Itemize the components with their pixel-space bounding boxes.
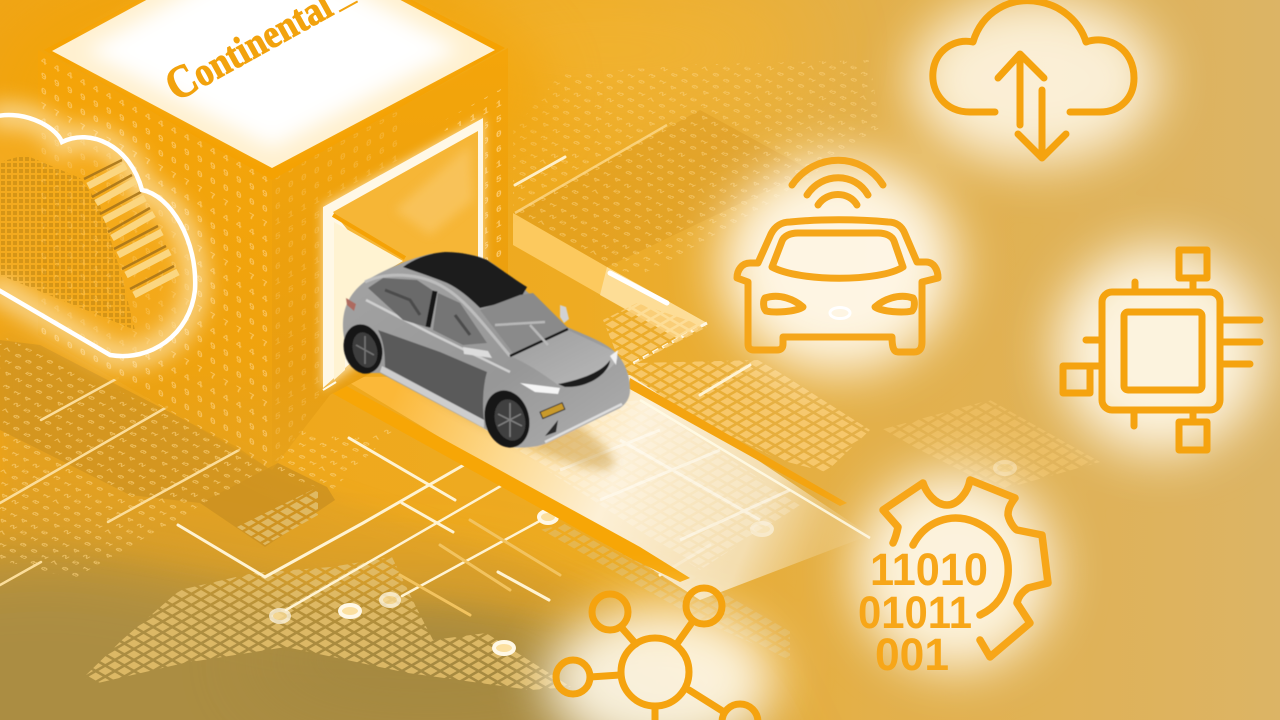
car — [338, 252, 630, 489]
car body — [343, 253, 630, 448]
binary digits: 11010 — [870, 544, 988, 595]
road lower edge — [330, 377, 690, 582]
hood — [510, 330, 618, 385]
world map dots — [84, 303, 1100, 690]
rear wheel — [338, 320, 388, 378]
cloud outline with data — [0, 115, 195, 356]
roof — [403, 252, 527, 308]
dark side panel — [378, 330, 487, 420]
icon glows — [545, 0, 1265, 720]
front wheel — [478, 385, 536, 453]
glowing road out of tunnel — [330, 375, 870, 600]
road circuit traces — [560, 430, 790, 540]
icon: cloud upload download — [933, 1, 1134, 158]
windshield — [480, 293, 568, 353]
icon: gear with binary data — [858, 480, 1048, 680]
lower intake — [545, 420, 558, 436]
headlight — [520, 383, 560, 394]
side windows — [368, 278, 435, 328]
number plate — [540, 403, 565, 419]
binary digits: 001 — [875, 629, 949, 680]
tunnel inner left wall — [334, 222, 403, 380]
circuit lines — [0, 157, 750, 615]
circuit ring nodes — [271, 462, 1015, 654]
tunnel opening — [322, 117, 484, 390]
data cube — [0, 0, 552, 470]
cube top face — [44, 0, 505, 180]
icon: connected car — [737, 160, 938, 352]
upper belt highlight — [366, 300, 510, 372]
raised light band — [513, 213, 707, 340]
icon: processor chip — [1063, 250, 1260, 450]
road upper edge — [628, 378, 847, 506]
icon: network nodes — [556, 588, 758, 720]
front grille — [558, 360, 610, 387]
data stripes — [88, 166, 178, 295]
lower left digit plane — [0, 335, 400, 580]
binary digits — [858, 544, 988, 680]
cube left face — [38, 50, 272, 470]
car shadow — [354, 311, 626, 489]
binary digits: 01011 — [858, 587, 972, 638]
side skirt — [380, 366, 484, 428]
mirror — [463, 347, 492, 358]
cube right face — [272, 48, 508, 470]
upper right digit plane — [513, 60, 880, 365]
rear light — [346, 298, 356, 311]
